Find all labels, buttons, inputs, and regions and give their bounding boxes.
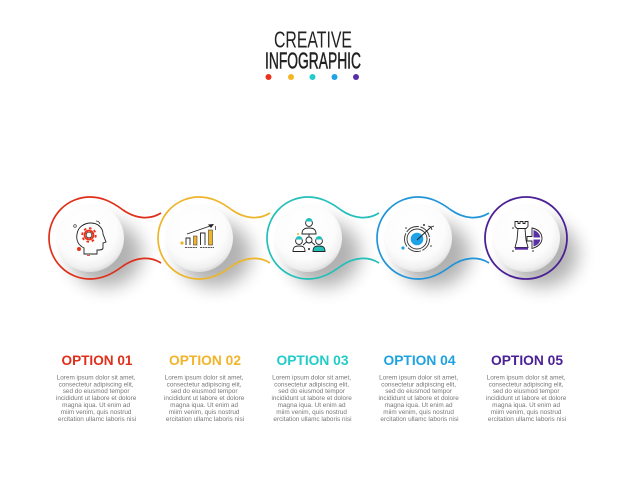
icon: chess tower and shield — [512, 222, 542, 252]
title: INFOGRAPHIC — [265, 48, 361, 74]
icon: team hierarchy — [293, 218, 325, 252]
option 03 text — [271, 352, 354, 423]
option 03 body: incididunt ut labore et dolore — [271, 395, 352, 402]
option 05 body: sed do eiusmod tempor — [493, 388, 560, 395]
option 02 body: miim venim, quis nostrud — [169, 409, 240, 416]
icon: target with arrow — [401, 224, 434, 252]
option 03 body: magna iqua. Ut enim ad — [278, 402, 346, 409]
option 05 body: miim venim, quis nostrud — [491, 409, 562, 416]
option 04 body: ercitation ullamc laboris nisi — [380, 416, 459, 423]
option 02 body: magna iqua. Ut enim ad — [170, 402, 238, 409]
option 01 body: Lorem ipsum dolor sit amet, — [57, 374, 136, 381]
option 03 body: Lorem ipsum dolor sit amet, — [272, 374, 351, 381]
option 04 body: consectetur adipiscing elit, — [381, 381, 456, 388]
option 02 body: incididunt ut labore et dolore — [164, 395, 245, 402]
option 05 heading: OPTION 05 — [491, 352, 563, 368]
option 04 body: magna iqua. Ut enim ad — [385, 402, 453, 409]
option 01 body: ercitation ullamc laboris nisi — [58, 416, 136, 423]
option 01 body: incididunt ut labore et dolore — [56, 395, 137, 402]
option 02 body: ercitation ullamc laboris nisi — [166, 416, 244, 423]
option 05 body: magna iqua. Ut enim ad — [492, 402, 560, 409]
icon: head with gear — [74, 221, 106, 256]
option 02 body: sed do eiusmod tempor — [171, 388, 238, 395]
title — [265, 26, 361, 74]
title: CREATIVE — [274, 26, 352, 52]
option 04 heading: OPTION 04 — [384, 352, 456, 368]
option 05 body: ercitation ullamc laboris nisi — [488, 416, 566, 423]
option 04 body: miim venim, quis nostrud — [383, 409, 454, 416]
step 1: mind circle — [49, 197, 161, 287]
option 05 body: consectetur adipiscing elit, — [489, 381, 564, 388]
option 04 body: Lorem ipsum dolor sit amet, — [379, 374, 458, 381]
option 02 heading: OPTION 02 — [169, 352, 241, 368]
option 03 heading: OPTION 03 — [276, 352, 349, 368]
option 01 text — [56, 352, 138, 423]
option 02 body: Lorem ipsum dolor sit amet, — [165, 374, 244, 381]
step 4: target circle — [377, 197, 489, 287]
option 04 body: sed do eiusmod tempor — [385, 388, 453, 395]
option 05 body: Lorem ipsum dolor sit amet, — [487, 374, 566, 381]
option 01 body: miim venim, quis nostrud — [61, 409, 132, 416]
option 03 body: sed do eiusmod tempor — [278, 388, 346, 395]
option 03 body: ercitation ullamc laboris nisi — [273, 416, 352, 423]
option 01 body: sed do eiusmod tempor — [63, 388, 130, 395]
icon: rising bar chart — [180, 224, 216, 248]
option 01 body: magna iqua. Ut enim ad — [62, 402, 130, 409]
option 01 heading: OPTION 01 — [62, 352, 133, 368]
step 2: growth circle — [158, 197, 270, 287]
option 05 text — [486, 352, 568, 423]
option 04 text — [378, 352, 461, 423]
title colour dots — [266, 74, 359, 80]
step 3: team circle — [267, 197, 379, 287]
option 01 body: consectetur adipiscing elit, — [59, 381, 134, 388]
option 03 body: consectetur adipiscing elit, — [274, 381, 349, 388]
option 03 body: miim venim, quis nostrud — [276, 409, 347, 416]
step 5: tower circle — [485, 197, 578, 287]
option 04 body: incididunt ut labore et dolore — [378, 395, 459, 402]
option 02 body: consectetur adipiscing elit, — [167, 381, 242, 388]
option 05 body: incididunt ut labore et dolore — [486, 395, 567, 402]
option 02 text — [164, 352, 246, 423]
